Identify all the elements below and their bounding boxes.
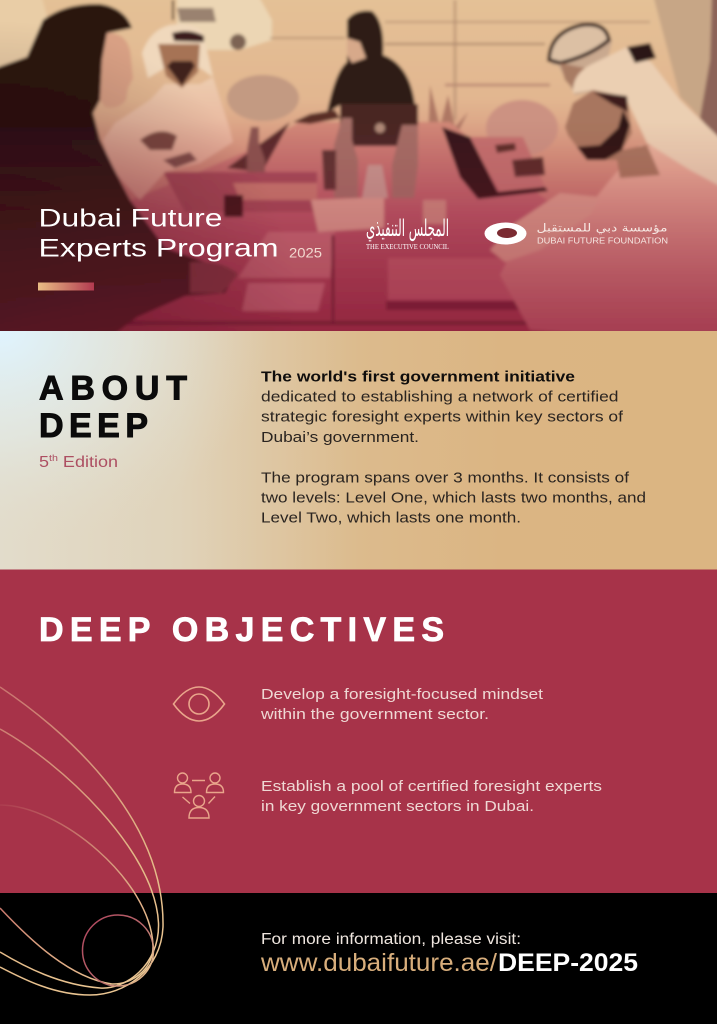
- about description: The world's first government initiative: [261, 368, 575, 386]
- logo: The Executive Council: THE EXECUTIVE COUNCIL: [366, 242, 449, 251]
- hero photo panel: [0, 0, 717, 345]
- heading: about deep: ABOUT: [39, 370, 187, 408]
- hero title: 2025: [289, 244, 322, 260]
- about description: dedicated to establishing a network of certified: [261, 389, 618, 406]
- about description: strategic foresight experts within key sectors of: [261, 409, 624, 426]
- icon: people network: [174, 773, 224, 818]
- panel: about deep: [0, 331, 717, 570]
- table and papers: [127, 120, 546, 328]
- panel: deep objectives: [0, 570, 717, 893]
- seated woman with laptop: [293, 11, 418, 146]
- objective 2 text: [261, 778, 602, 815]
- panel: footer: [0, 893, 717, 1024]
- heading: about deep: [39, 370, 187, 445]
- laptop right: [442, 127, 548, 199]
- footer url: www.dubaifuture.ae/: [260, 949, 497, 977]
- logo: The Executive Council: المجلس التنفيذي: [366, 216, 449, 242]
- edition label: Edition: [58, 454, 118, 471]
- footer prompt: For more information, please visit:: [261, 931, 521, 948]
- edition label: 5: [39, 454, 48, 471]
- objective 1 text: [260, 686, 544, 723]
- bottles on the table: [322, 118, 418, 198]
- logo mark: [484, 222, 526, 244]
- window background and car: [0, 0, 717, 156]
- laptop and bottle left: [227, 122, 290, 172]
- icon: eye: [174, 687, 224, 721]
- hero title: Dubai Future: [38, 205, 222, 233]
- objective 2 text: in key government sectors in Dubai.: [261, 798, 534, 815]
- about description: two levels: Level One, which lasts two months, and: [261, 489, 646, 506]
- logo: Dubai Future Foundation: [484, 222, 668, 246]
- heading: deep objectives: DEEP OBJECTIVES: [39, 611, 444, 649]
- about description: Level Two, which lasts one month.: [261, 510, 521, 526]
- men with headdress at right: [490, 25, 717, 345]
- footer url: [260, 949, 638, 977]
- about description: [261, 368, 646, 526]
- about description: Dubai’s government.: [261, 429, 419, 446]
- objective 1 text: Develop a foresight-focused mindset: [261, 686, 544, 703]
- hero title: [38, 205, 322, 263]
- heading: about deep: DEEP: [39, 407, 148, 445]
- objective 2 text: Establish a pool of certified foresight experts: [261, 778, 602, 795]
- decorative orbit arcs: [0, 687, 163, 995]
- logo: Dubai Future Foundation: مؤسسة دبي للمستقبل: [536, 222, 668, 234]
- logo: The Executive Council: [366, 216, 449, 251]
- edition label: th: [49, 453, 58, 464]
- about description: The program spans over 3 months. It consists of: [261, 469, 630, 486]
- objective 1 text: within the government sector.: [260, 706, 489, 723]
- logo: Dubai Future Foundation: DUBAI FUTURE FOUNDATION: [537, 236, 668, 246]
- center man in white robe: [103, 24, 233, 200]
- accent bar: [38, 282, 94, 290]
- footer url: DEEP-2025: [498, 949, 638, 977]
- woman on far left: [0, 4, 238, 345]
- hero title: Experts Program: [38, 235, 278, 263]
